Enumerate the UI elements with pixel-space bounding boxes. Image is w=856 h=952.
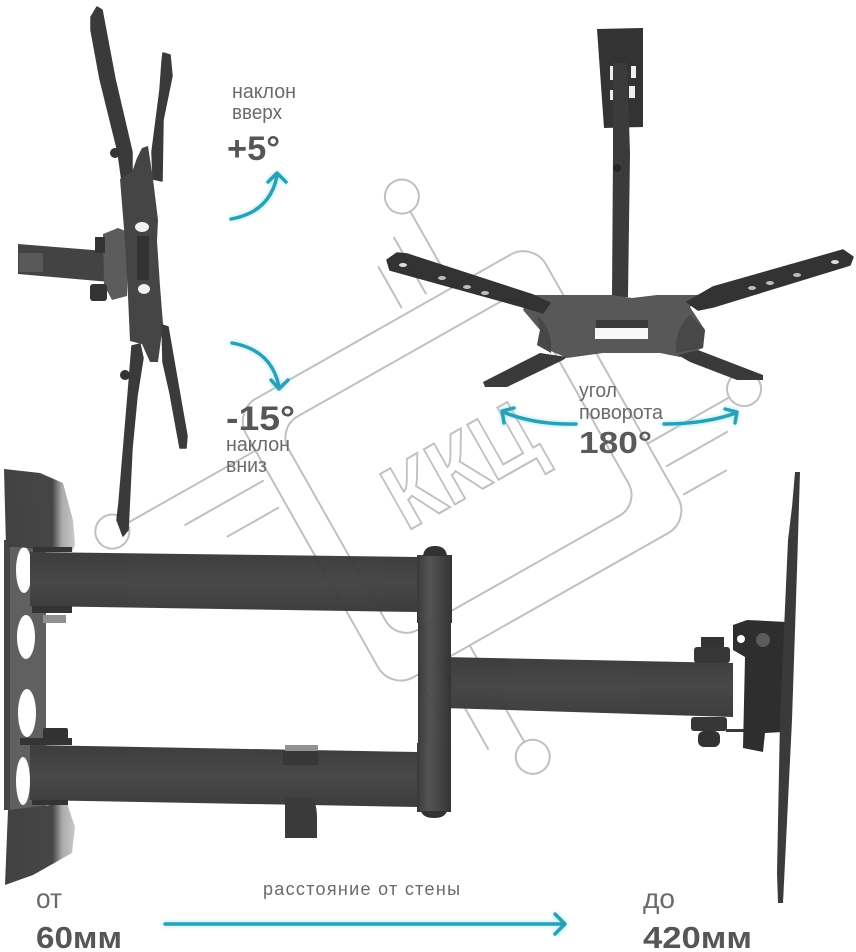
label: distance from wall: расстояние от стены	[263, 879, 460, 899]
upper right arm	[687, 250, 853, 310]
wall plate middle	[8, 540, 46, 810]
arrow: swivel right	[664, 409, 737, 424]
label: maximum distance: до	[643, 883, 675, 914]
nuts and flanges	[33, 547, 72, 552]
tv plate	[777, 472, 800, 903]
lower arm	[30, 745, 417, 807]
label: minimum distance: от	[36, 883, 62, 914]
forearm	[443, 657, 733, 717]
photo: mount top view, swivel	[387, 28, 853, 387]
arrow: tilt up	[231, 173, 286, 219]
label: swivel angle: угол	[579, 380, 617, 402]
arm	[612, 63, 630, 297]
arrow: tilt down	[232, 343, 288, 389]
wall plate top block	[4, 469, 75, 552]
watermark logo: ККЦ	[366, 382, 556, 549]
label: tilt up: наклон	[232, 81, 296, 103]
central plate	[523, 295, 705, 358]
nuts at swivel	[701, 637, 724, 647]
value: +5 degrees: +5°	[227, 130, 280, 168]
arm stub	[18, 244, 110, 282]
label: maximum distance	[643, 883, 752, 952]
upper left arm	[387, 253, 550, 313]
arrow: distance	[165, 914, 565, 934]
label: tilt up: вверх	[232, 102, 282, 124]
value: -15 degrees: -15°	[226, 400, 295, 438]
swivel bracket	[733, 620, 787, 752]
wall plate	[597, 28, 643, 128]
label: tilt down: наклон	[226, 434, 290, 456]
upper arm	[30, 552, 417, 612]
lower left plate arm	[117, 344, 143, 536]
central plate	[120, 146, 163, 362]
label: minimum distance	[36, 883, 122, 952]
hinge	[417, 555, 452, 623]
upper left plate arm	[91, 7, 132, 182]
lower right arm	[678, 350, 763, 380]
lower right plate arm	[162, 325, 187, 448]
label: tilt down: вниз	[226, 455, 267, 477]
value: 180 degrees: 180°	[579, 425, 652, 460]
label: swivel angle	[579, 380, 664, 460]
wall plate bottom block	[5, 803, 75, 885]
upper right plate arm	[152, 53, 172, 181]
tilt bracket	[103, 228, 128, 300]
label: swivel angle: поворота	[579, 402, 664, 424]
arrow: swivel left	[502, 408, 576, 424]
lower left arm	[483, 353, 567, 387]
label: tilt up	[227, 81, 296, 168]
label: tilt down	[226, 400, 295, 477]
photo: mount front view, extension	[4, 469, 800, 903]
photo: mount side view, tilt	[18, 7, 187, 536]
cable clip	[285, 745, 318, 751]
